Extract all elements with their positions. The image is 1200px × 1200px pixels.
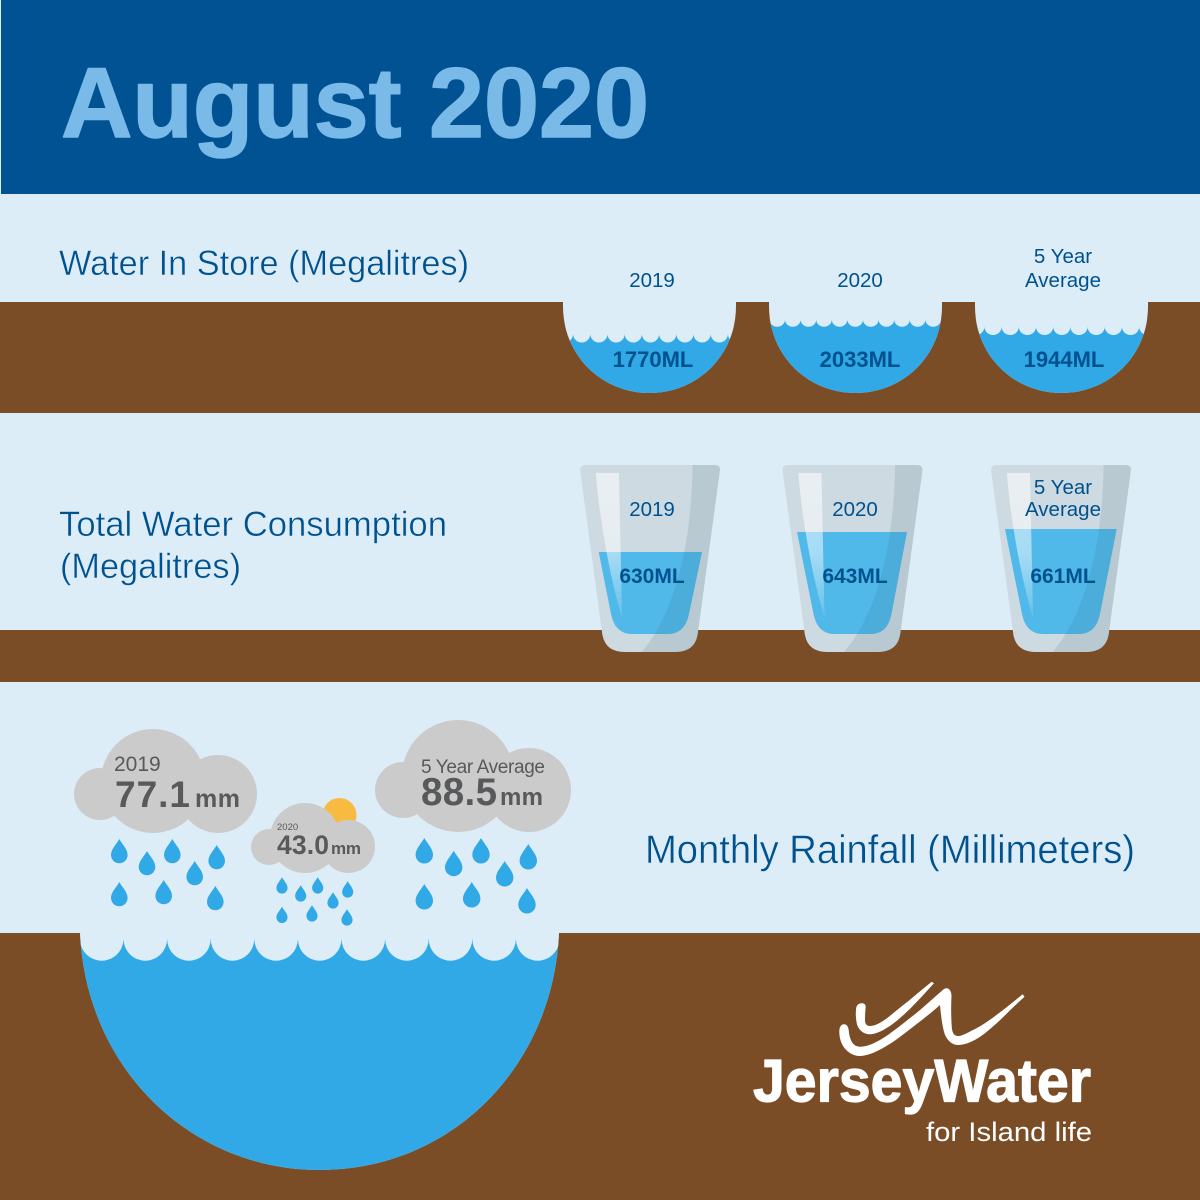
panel: total water consumption xyxy=(0,465,1200,682)
logo wordmark: JerseyWater xyxy=(753,1048,1091,1114)
glass 5 year average xyxy=(991,460,1136,660)
title: August 2020 xyxy=(61,47,649,158)
reservoir 2020: 2033ML xyxy=(820,347,900,372)
logo: jersey water xyxy=(753,982,1092,1147)
reservoir 5 year average xyxy=(975,249,1148,393)
cloud 2019: mm xyxy=(195,785,240,813)
cloud 2020: 2020 xyxy=(277,822,298,833)
cloud 2020 xyxy=(251,803,375,873)
icon: logo waves xyxy=(839,982,1024,1056)
reservoir 2019: 2019 xyxy=(629,269,675,292)
heading: total water consumption: Total Water Consumption xyxy=(59,505,447,544)
cloud 5 year average: 88.5 xyxy=(421,771,497,814)
heading: monthly rainfall: Monthly Rainfall (Millimeters) xyxy=(645,828,1135,872)
glass 5 year average: 5 Year xyxy=(1034,476,1092,499)
glass 2019 xyxy=(580,460,725,660)
rain drops 2020 xyxy=(276,877,353,926)
reservoir 2020 xyxy=(765,269,945,396)
glass 2020 xyxy=(782,460,928,660)
rainfall reservoir xyxy=(75,917,565,1174)
cloud 5 year average: 5 Year Average xyxy=(421,757,545,778)
panel: monthly rainfall xyxy=(0,682,1200,1200)
reservoir 2020: 2020 xyxy=(837,269,883,292)
heading: water in store: Water In Store (Megalitres) xyxy=(59,244,469,283)
glass 2020: 643ML xyxy=(822,565,888,588)
cloud 2020: mm xyxy=(331,839,361,858)
cloud 2019: 2019 xyxy=(114,753,161,776)
reservoir 5 year average: 5 Year xyxy=(1034,245,1092,268)
panel: water in store xyxy=(0,249,1200,413)
cloud 2019: 77.1 xyxy=(115,774,190,815)
reservoir 5 year average: Average xyxy=(1025,269,1101,292)
heading: megalitres: (Megalitres) xyxy=(60,547,241,586)
logo tagline: for Island life xyxy=(926,1117,1092,1147)
glass 2020: 2020 xyxy=(832,498,878,521)
header banner xyxy=(1,0,1200,194)
glass 2019: 2019 xyxy=(629,498,675,521)
rain drops 2019 xyxy=(111,839,225,910)
cloud 2020: 43.0 xyxy=(277,830,329,860)
reservoir 2019: 1770ML xyxy=(613,347,693,372)
reservoir 2019 xyxy=(563,273,736,393)
rain drops 5 year average xyxy=(416,838,537,914)
reservoir 5 year average: 1944ML xyxy=(1024,347,1104,372)
cloud 2019 xyxy=(74,729,257,833)
cloud 5 year average xyxy=(375,720,571,832)
icon: sun xyxy=(322,798,356,832)
glass 5 year average: 661ML xyxy=(1030,565,1096,588)
glass 5 year average: Average xyxy=(1025,498,1101,521)
glass 2019: 630ML xyxy=(619,565,685,588)
cloud 5 year average: mm xyxy=(500,784,543,811)
